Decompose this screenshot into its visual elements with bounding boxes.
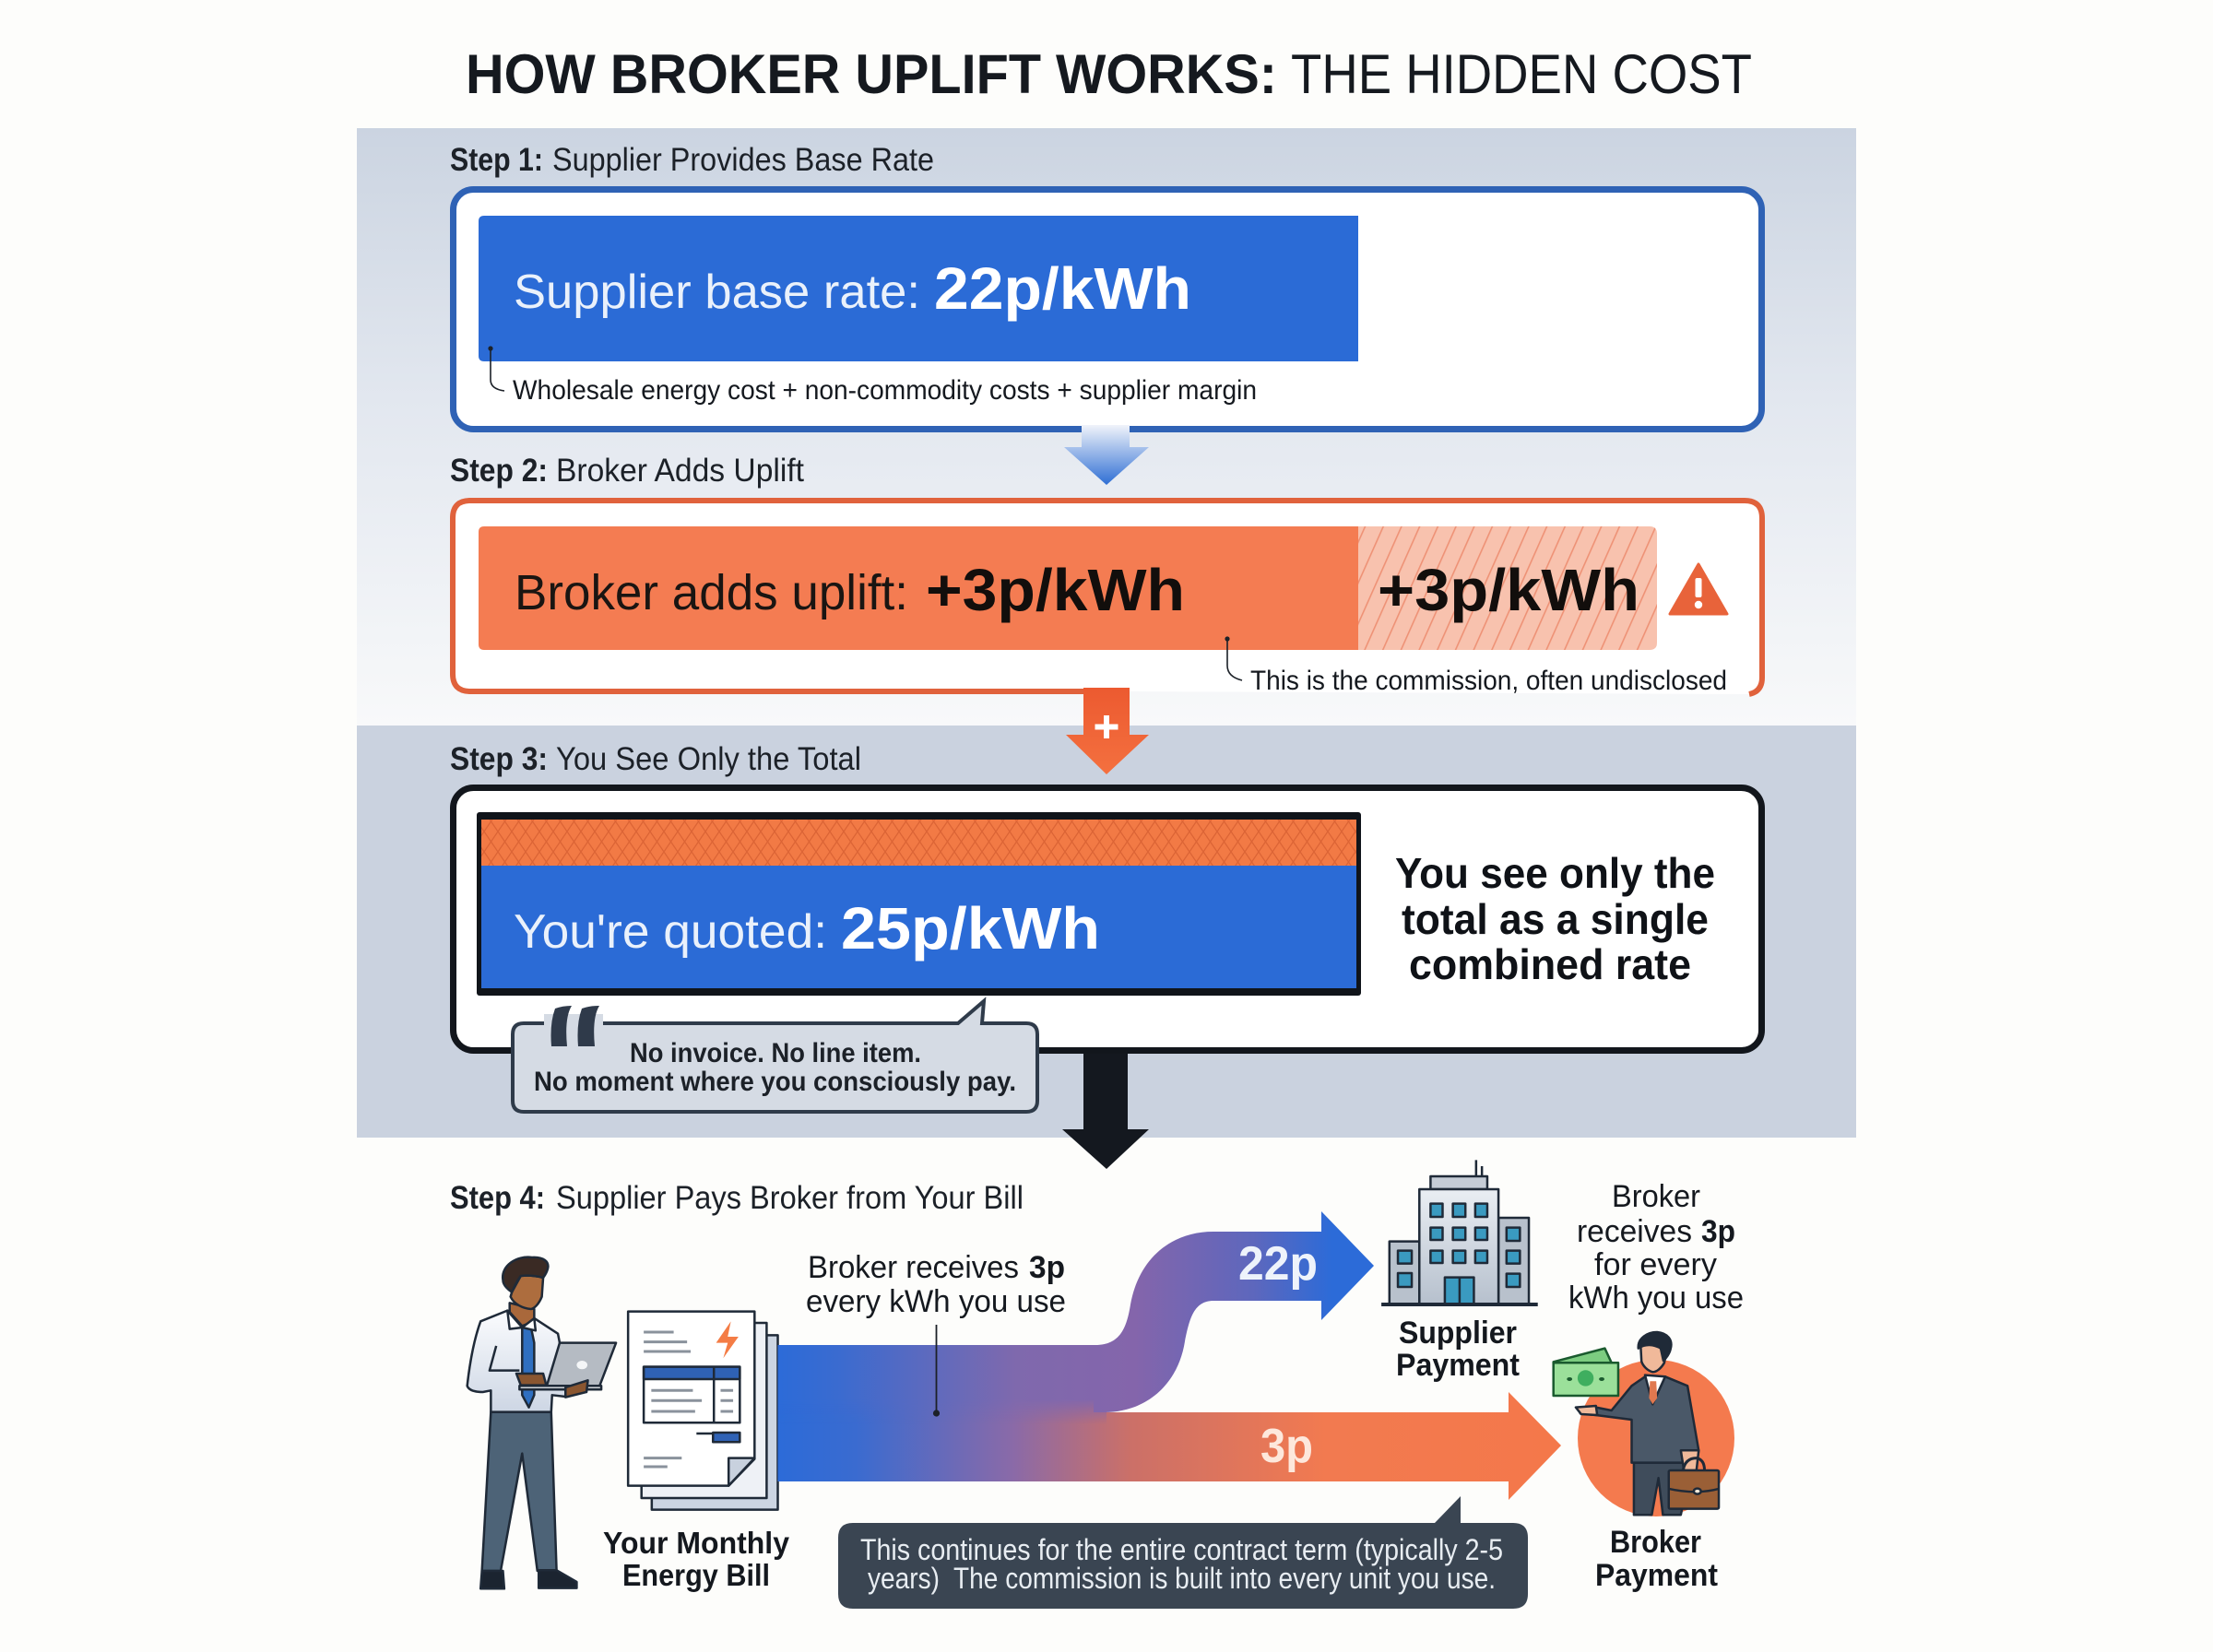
bar: broker adds uplift: [479, 526, 1358, 650]
text: you see only the total: [1395, 849, 1715, 988]
diagram: payment flow split: [778, 1211, 1561, 1500]
heading: step 1: Supplier Provides Base Rate: [552, 142, 934, 178]
bar: broker adds uplift: +3p/kWh: [926, 557, 1185, 623]
callout: contract term note: years) The commission is built into every unit you use.: [868, 1562, 1496, 1595]
annotation: undisclosed commission: [1225, 636, 1727, 696]
arrow: 22p to supplier: 22p: [1238, 1237, 1318, 1291]
text: you see only the total: You see only the: [1395, 849, 1715, 897]
bar: combined quoted rate: 25p/kWh: [841, 895, 1100, 962]
text: broker receives 3p for every kWh: 3p: [1701, 1214, 1735, 1249]
icon: person with laptop: [467, 1257, 616, 1588]
annotation: base rate components: [488, 346, 1257, 406]
callout: no invoice: [513, 1001, 1037, 1112]
label: broker payment: [1595, 1525, 1718, 1593]
label: broker payment: Payment: [1595, 1558, 1718, 1593]
text: you see only the total: total as a single: [1402, 895, 1709, 943]
icon: monthly energy bill document: [628, 1312, 778, 1510]
text: broker receives 3p for every kWh: Broker: [1612, 1179, 1700, 1214]
text: broker receives 3p for every kWh: kWh you use: [1568, 1280, 1744, 1316]
label: supplier payment: Supplier: [1399, 1316, 1517, 1351]
label: your monthly energy bill: [603, 1526, 790, 1592]
arrow: 3p to broker: [778, 1345, 1561, 1500]
label: supplier payment: Payment: [1396, 1348, 1520, 1383]
bar: combined quoted rate: [477, 812, 1361, 996]
heading: step 1: Step 1:: [450, 142, 543, 178]
bar: hatched uplift segment: +3p/kWh: [1378, 557, 1639, 623]
bar: hatched uplift segment: [1358, 526, 1657, 650]
heading: step 4: Supplier Pays Broker from Your Bill: [556, 1180, 1024, 1216]
label: your monthly energy bill: Your Monthly: [603, 1526, 790, 1560]
heading: step 2: [450, 453, 804, 489]
arrow: 22p to supplier: [1094, 1211, 1374, 1412]
annotation: broker receives 3p every kWh: every kWh you use: [806, 1284, 1066, 1319]
label: broker payment: Broker: [1610, 1525, 1701, 1560]
bar: broker adds uplift: Broker adds uplift:: [515, 565, 908, 620]
background band: steps 1 and 2: [357, 128, 1856, 726]
callout: contract term note: [838, 1496, 1528, 1609]
text: you see only the total: combined rate: [1409, 940, 1691, 988]
heading: step 2: Step 2:: [450, 453, 548, 489]
heading: step 4: Step 4:: [450, 1180, 545, 1216]
callout: no invoice: No moment where you consciously pay.: [534, 1067, 1016, 1097]
text: broker receives 3p for every kWh: [1568, 1179, 1744, 1316]
label: supplier payment: [1396, 1316, 1520, 1383]
heading: step 2: Broker Adds Uplift: [556, 453, 804, 489]
icon: warning triangle: [1670, 564, 1727, 614]
bar: supplier base rate: Supplier base rate:: [514, 266, 920, 319]
icon: supplier building: [1381, 1160, 1538, 1304]
annotation: undisclosed commission: This is the commission, often undisclosed: [1250, 666, 1727, 696]
heading: step 3: Step 3:: [450, 741, 548, 777]
bar: supplier base rate: [479, 216, 1358, 361]
panel: step 2 broker uplift: [453, 501, 1762, 696]
label: your monthly energy bill: Energy Bill: [622, 1558, 770, 1592]
annotation: broker receives 3p every kWh: [806, 1250, 1066, 1417]
icon: quotation mark: [551, 1006, 599, 1046]
icon: broker with money and briefcase: [1554, 1332, 1734, 1516]
title: [466, 43, 1752, 105]
background band: step 3: [357, 726, 1856, 1138]
title: THE HIDDEN COST: [1291, 43, 1752, 105]
text: broker receives 3p for every kWh: for every: [1594, 1247, 1717, 1282]
bar: supplier base rate: 22p/kWh: [934, 255, 1191, 322]
arrow: 3p to broker: 3p: [1260, 1420, 1313, 1473]
arrow: step 3 to step 4: [1062, 1054, 1149, 1169]
panel: step 3 quoted total: [454, 787, 1761, 1051]
bar: combined quoted rate: You're quoted:: [514, 905, 827, 959]
callout: contract term note: This continues for the entire contract term (typically 2-5: [860, 1533, 1503, 1566]
annotation: broker receives 3p every kWh: 3p: [1029, 1250, 1065, 1285]
panel: step 1 supplier base rate: [454, 190, 1761, 430]
arrow: plus step 2 to step 3: [1066, 688, 1149, 774]
callout: no invoice: No invoice. No line item.: [630, 1038, 921, 1068]
arrow: step 1 to step 2: [1064, 425, 1149, 485]
annotation: broker receives 3p every kWh: Broker receives: [808, 1250, 1019, 1285]
annotation: base rate components: Wholesale energy cost + non-commodity costs + supplier margin: [513, 375, 1257, 406]
title: HOW BROKER UPLIFT WORKS:: [466, 43, 1277, 105]
text: broker receives 3p for every kWh: receives: [1577, 1214, 1692, 1249]
heading: step 3: You See Only the Total: [556, 741, 861, 777]
